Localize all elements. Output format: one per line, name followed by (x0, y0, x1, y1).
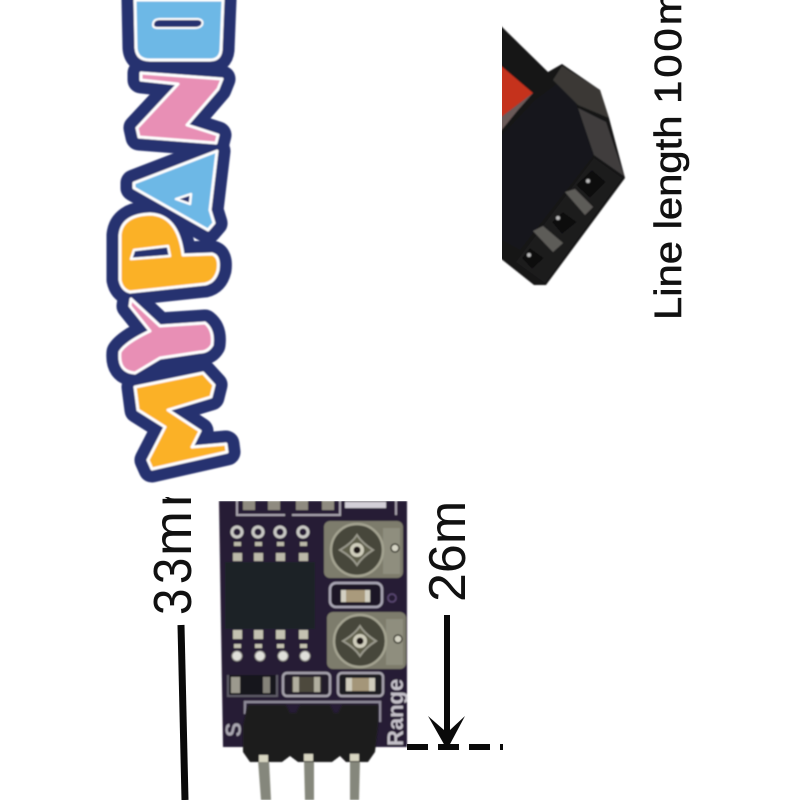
bottom IC pins (232, 630, 310, 661)
silkscreen label Range: Range (383, 679, 408, 746)
header pins metal (258, 760, 360, 800)
IC chip (225, 562, 315, 629)
photo: connector plug (500, 25, 625, 285)
infographic canvas (105, 0, 690, 800)
pin header block (243, 705, 378, 762)
board substrate (219, 501, 407, 747)
lower components row (228, 673, 383, 696)
photo: sensor board (219, 501, 408, 747)
dimension label: 33mm: 33 (142, 553, 203, 615)
silkscreen label S: S (221, 722, 246, 737)
dimension arrow: 26mm (428, 615, 465, 746)
capacitor (330, 583, 396, 607)
logo: MYPANDA wordmark (120, 0, 227, 469)
dimension line: 33mm (181, 625, 185, 800)
top IC pins (232, 527, 308, 561)
dimension label: 33mm: mm (143, 458, 203, 556)
pin header assembly (243, 705, 378, 800)
silkscreen outline (245, 702, 380, 722)
letter N (137, 73, 222, 143)
letter P (120, 214, 218, 292)
letter D (135, 0, 223, 60)
potentiometer bottom (327, 612, 406, 669)
top silkscreen row (237, 501, 396, 515)
dashed baseline (407, 744, 503, 750)
letter A (134, 151, 217, 230)
letter M (135, 373, 227, 469)
pin tips (259, 754, 359, 762)
letter Y (120, 299, 212, 373)
dimension label: 33mm (154, 497, 192, 614)
dimension label: 26mm: 26mm (419, 458, 477, 602)
potentiometer top (324, 521, 403, 578)
logo navy outline (120, 0, 227, 469)
